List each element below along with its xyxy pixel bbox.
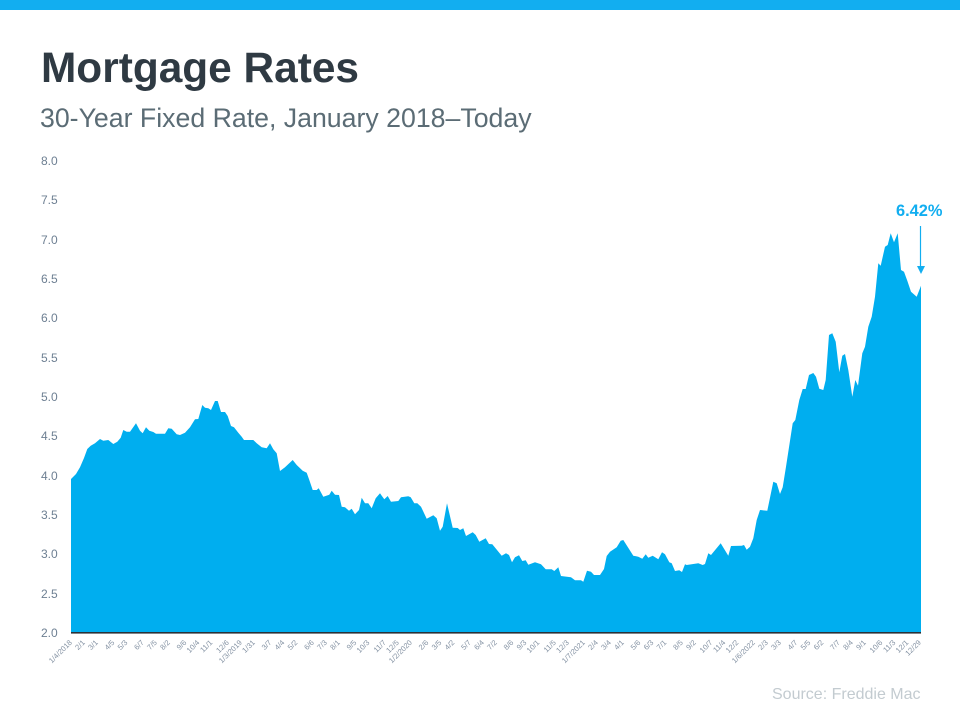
x axis date labels: 6/4 — [472, 638, 486, 652]
x axis date labels: 7/2 — [485, 638, 499, 652]
x axis date labels: 5/2 — [286, 638, 299, 652]
x axis date labels: 5/5 — [799, 638, 812, 652]
y axis labels: 7.0 — [41, 233, 58, 247]
x axis date labels: 5/6 — [629, 638, 642, 652]
x axis date labels: 3/4 — [599, 638, 613, 652]
x axis date labels: 9/5 — [345, 638, 358, 652]
y axis labels: 7.5 — [41, 193, 58, 207]
x axis date labels — [47, 638, 923, 665]
x axis date labels: 3/1 — [86, 638, 100, 652]
title: Mortgage Rates — [41, 44, 359, 91]
y axis labels: 4.0 — [41, 469, 58, 483]
x axis date labels: 3/7 — [260, 638, 273, 652]
x axis date labels: 7/3 — [315, 638, 329, 652]
x axis date labels: 12/5 — [384, 638, 401, 655]
y axis labels: 3.5 — [41, 508, 58, 522]
x axis date labels: 12/3 — [554, 638, 571, 655]
y axis labels: 3.0 — [41, 547, 58, 561]
y axis labels — [41, 154, 58, 640]
x axis date labels: 11/1 — [198, 638, 214, 654]
x axis date labels: 8/1 — [328, 638, 342, 652]
x axis date labels: 2/3 — [756, 638, 770, 652]
x axis date labels: 6/3 — [642, 638, 655, 652]
source note: Source: Freddie Mac — [772, 686, 921, 703]
y axis labels: 6.5 — [41, 272, 58, 286]
x axis date labels: 7/7 — [828, 638, 842, 652]
x axis date labels: 1/3/2019 — [217, 638, 244, 665]
x axis date labels: 12/29 — [903, 638, 923, 658]
x axis baseline — [71, 632, 921, 634]
y axis labels: 2.5 — [41, 587, 58, 601]
y axis labels: 8.0 — [41, 154, 58, 168]
x axis date labels: 6/2 — [812, 638, 825, 652]
x axis date labels: 1/31 — [240, 638, 257, 655]
x axis date labels: 5/7 — [459, 638, 473, 652]
y axis labels: 5.5 — [41, 351, 58, 365]
x axis date labels: 4/5 — [103, 638, 116, 652]
x axis date labels: 4/1 — [612, 638, 626, 652]
x axis date labels: 3/3 — [769, 638, 783, 652]
x axis date labels: 9/3 — [515, 638, 528, 652]
x axis date labels: 11/5 — [542, 638, 558, 654]
x axis date labels: 8/4 — [841, 638, 855, 652]
x axis date labels: 9/1 — [854, 638, 868, 652]
y axis labels: 5.0 — [41, 390, 58, 404]
x axis date labels: 3/5 — [430, 638, 443, 652]
x axis date labels: 1/4/2018 — [47, 638, 74, 665]
x axis date labels: 11/7 — [372, 638, 388, 654]
x axis date labels: 8/5 — [671, 638, 685, 652]
x axis date labels: 10/6 — [868, 638, 884, 655]
x axis date labels: 5/3 — [116, 638, 129, 652]
x axis date labels: 10/1 — [525, 638, 541, 655]
x axis date labels: 10/3 — [355, 638, 371, 655]
x axis date labels: 8/2 — [158, 638, 172, 652]
y axis labels: 2.0 — [41, 626, 58, 640]
x axis date labels: 9/6 — [175, 638, 188, 652]
x axis date labels: 2/1 — [73, 638, 87, 652]
x axis date labels: 9/2 — [684, 638, 698, 652]
y axis labels: 6.0 — [41, 311, 58, 325]
area chart: 30-year fixed mortgage rate — [71, 233, 921, 632]
x axis date labels: 7/1 — [655, 638, 668, 652]
x axis date labels: 6/7 — [132, 638, 146, 652]
x axis date labels: 1/2/2020 — [387, 638, 414, 665]
x axis date labels: 1/7/2021 — [560, 638, 587, 665]
x axis date labels: 11/3 — [881, 638, 897, 654]
x axis date labels: 12/6 — [214, 638, 231, 655]
x axis date labels: 8/6 — [502, 638, 515, 652]
x axis date labels: 10/7 — [698, 638, 714, 655]
callout: current rate value: 6.42% — [896, 202, 943, 220]
x axis date labels: 4/2 — [443, 638, 456, 652]
x axis date labels: 11/4 — [711, 638, 727, 654]
arrow: points to latest rate — [917, 226, 925, 274]
x axis date labels: 4/4 — [273, 638, 286, 652]
y axis labels: 4.5 — [41, 429, 58, 443]
x axis date labels: 7/5 — [145, 638, 159, 652]
x axis date labels: 10/4 — [185, 638, 201, 655]
x axis date labels: 6/6 — [302, 638, 316, 652]
x axis date labels: 2/4 — [586, 638, 600, 652]
x axis date labels: 12/1 — [894, 638, 910, 655]
top accent bar — [0, 0, 960, 10]
x axis date labels: 4/7 — [786, 638, 799, 652]
x axis date labels: 12/2 — [724, 638, 740, 655]
x axis date labels: 1/6/2022 — [730, 638, 757, 665]
x axis date labels: 2/6 — [417, 638, 430, 652]
subtitle: 30-Year Fixed Rate, January 2018–Today — [40, 103, 532, 133]
